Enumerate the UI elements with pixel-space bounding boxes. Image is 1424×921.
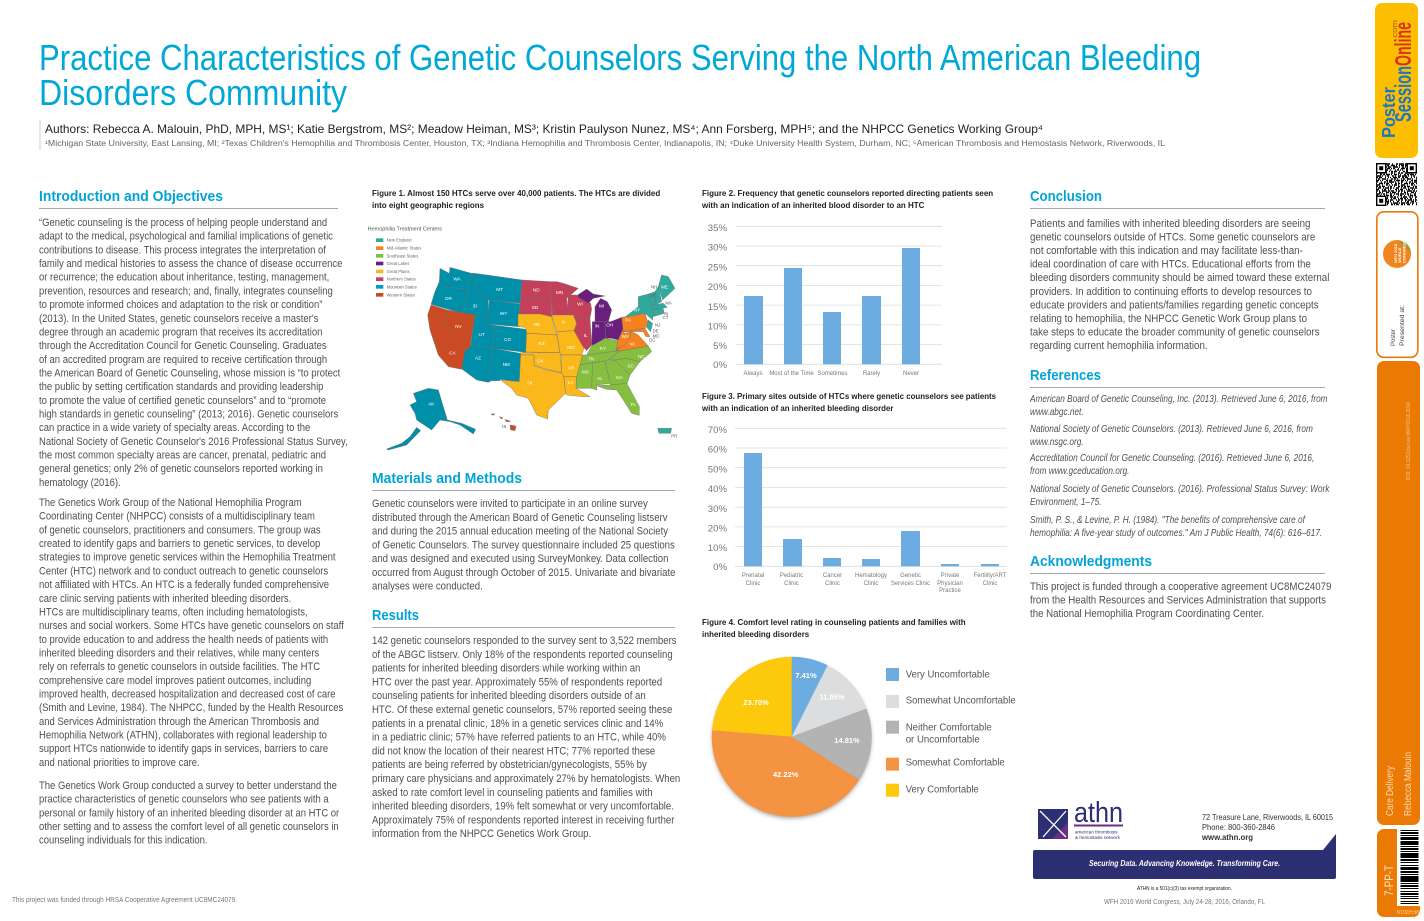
text block: intro paragraph 3 — [39, 781, 342, 847]
text block: conclusion: take steps to educate the broader community of genetic counselors — [1030, 327, 1320, 339]
text block: intro paragraph 2: created to identify gaps and barriers to genetic services, to develop — [39, 539, 321, 550]
sidebar: poster session online logo: Session — [1390, 66, 1416, 122]
pie legend: Very Comfortable — [906, 784, 979, 796]
state abbreviations: WA — [453, 276, 462, 281]
bar chart: figure 3: Clinic — [825, 581, 840, 587]
text block: references: National Society of Genetic Counselors. (2013). Retrieved June 6, 2016, from — [1030, 423, 1313, 434]
bar chart: figure 2 — [708, 223, 942, 377]
heading: conclusion: Conclusion — [1030, 188, 1102, 205]
map: hemophilia treatment centers: NJ — [655, 322, 660, 327]
bar chart: figure 3: Practice — [939, 588, 961, 594]
sidebar: poster session online logo: Poster — [1379, 87, 1399, 138]
text block: references: www.nsgc.org. — [1030, 436, 1084, 447]
map legend: Southeast States — [387, 253, 418, 258]
state abbreviations: NV — [455, 324, 462, 329]
text block: methods: Genetic counselors were invited to participate in an online survey — [372, 499, 649, 510]
figure 3 caption: with an indication of an inherited bleeding disorder — [701, 404, 894, 413]
state abbreviations: OR — [445, 296, 452, 301]
figure 2 caption — [701, 189, 993, 210]
bar chart: figure 3: Fertility/ART — [974, 573, 1007, 579]
panel: results — [372, 607, 683, 840]
bar chart: figure 3: Pediatric — [780, 573, 803, 579]
text block: conclusion: ideal coordination of care with HTCs. Educational efforts from the — [1030, 259, 1311, 271]
text block: intro paragraph 1: prevention, resources and research; and, finally, integrates counseling — [39, 286, 333, 298]
text block: intro paragraph 1: of an accredited program are required to receive certification through — [39, 354, 327, 366]
text block: references: www.abgc.net. — [1030, 406, 1084, 417]
text block: conclusion: bleeding disorders community should be aimed toward these external — [1030, 273, 1329, 284]
figure 3 caption — [701, 392, 996, 413]
state abbreviations: NC — [638, 354, 645, 359]
bar chart: figure 3: 40% — [708, 484, 727, 495]
sidebar: presented at panel — [1377, 212, 1418, 357]
region: new england — [626, 275, 675, 433]
text block: intro paragraph 1: the public by setting certification standards and providing leadership — [39, 382, 324, 393]
bar chart: figure 3: Clinic — [746, 581, 760, 587]
athn tax note: ATHN is a 501(c)(3) tax exempt organization. — [1137, 886, 1232, 892]
map legend: Great Lakes — [387, 261, 409, 266]
sidebar: poster session online logo — [1375, 3, 1418, 158]
text block: acknowledgments: from the Health Resources and Services Administration that supports — [1030, 595, 1326, 607]
state abbreviations: ME — [661, 285, 668, 290]
athn tagline band — [1033, 834, 1336, 879]
region: mountain states — [387, 267, 527, 450]
text block: intro paragraph 2: to provide education to and address the health needs of patients with — [39, 634, 328, 646]
text block: intro paragraph 1: “Genetic counseling is the process of helping people understand and — [39, 218, 327, 229]
state abbreviations: VA — [629, 341, 636, 346]
bar chart: figure 3: Physician — [937, 581, 963, 587]
state abbreviations: WI — [577, 302, 583, 307]
state abbreviations: IN — [595, 324, 599, 329]
state abbreviations: TN — [588, 356, 594, 361]
bar chart: figure 3: 30% — [708, 504, 727, 515]
text block: intro paragraph 2: rely on referrals to genetic counselors in outside facilities. The HTC — [39, 662, 320, 673]
text block: intro paragraph 2: The Genetics Work Group of the National Hemophilia Program — [39, 498, 302, 509]
panel: conclusion — [1030, 188, 1332, 352]
bar chart: figure 2: 30% — [708, 243, 727, 254]
sidebar: poster session online logo: .com — [1392, 20, 1399, 40]
text block: intro paragraph 2: Coordinating Center (NHPCC) consists of a multidisciplinary team — [39, 511, 315, 523]
text block: intro paragraph 3: practice characteristics of genetic counselors who see patients with a — [39, 794, 329, 806]
sidebar: presented at panel: Presented at: — [1399, 305, 1406, 346]
text block: results: inherited bleeding disorders, 19% felt somewhat or very uncomfortable. — [372, 801, 674, 813]
figure 1 caption: Figure 1. Almost 150 HTCs serve over 40,000 patients. The HTCs are divided — [372, 189, 660, 198]
title — [39, 37, 1201, 113]
pie legend: or Uncomfortable — [906, 734, 980, 746]
bar chart: figure 2: 0% — [713, 360, 727, 371]
region: southeast states — [576, 338, 652, 415]
text block: intro paragraph 1: adapt to the medical, psychological and familial implications of genetic — [39, 231, 333, 243]
text block: intro paragraph 1: can practice in a wide variety of specialty areas. According to the — [39, 423, 311, 434]
state abbreviations: WY — [500, 311, 507, 316]
bar chart: figure 2: 20% — [708, 282, 727, 293]
text block: results: counseling patients for inherited bleeding disorders outside of an — [372, 691, 646, 702]
bar chart: figure 3: Hematology — [855, 573, 887, 579]
state abbreviations: SC — [627, 363, 635, 368]
sidebar: presented at panel: Poster — [1390, 328, 1397, 346]
text block: methods: occurred from August through October of 2015. Univariate and bivariate — [372, 567, 676, 579]
text block: references: Smith, P. S., & Levine, P. H. (1984). "The benefits of comprehensive care of — [1030, 514, 1306, 525]
map legend: Western States — [387, 292, 415, 297]
text block: results: patients are being referred by obstetrician/gynecologists, 55% by — [372, 760, 648, 771]
map legend: New England — [387, 238, 412, 243]
text block: intro paragraph 1: to promote the value of certified genetic counselors” and to “promote — [39, 395, 326, 407]
map: hemophilia treatment centers: MD — [653, 334, 659, 339]
bar chart: figure 2: 5% — [713, 341, 727, 352]
bar chart: figure 3: 20% — [708, 524, 727, 534]
state abbreviations: MO — [567, 345, 575, 350]
text block: references: hemophilia: A five-year study of outcomes." Am J Public Health, 74(6): 616–617. — [1030, 527, 1322, 538]
text block: intro paragraph 2: inherited bleeding disorders and their relatives, while many centers — [39, 648, 319, 660]
text block: intro paragraph 1: (2013). In the United States, genetic counselors receive a master's — [39, 313, 318, 325]
title: Practice Characteristics of Genetic Counselors Serving the North American Bleeding — [39, 37, 1201, 78]
text block: intro paragraph 2: not affiliated with HTCs. An HTC is a federally funded comprehensive — [39, 580, 329, 591]
map: hemophilia treatment centers: VT — [651, 293, 657, 298]
bar chart: figure 3: Private — [941, 573, 960, 579]
sidebar: orange info band: Rebecca Malouin — [1402, 752, 1414, 816]
text block: references: American Board of Genetic Counseling, Inc. (2013). Retrieved June 6, 2016, from — [1029, 393, 1328, 404]
text block: acknowledgments — [1030, 582, 1334, 620]
map legend: Mid-Atlantic States — [387, 246, 421, 251]
bar chart: figure 3: Clinic — [983, 581, 997, 587]
state abbreviations: AL — [597, 376, 603, 381]
state abbreviations: CA — [449, 351, 456, 356]
region: northern states — [519, 280, 592, 351]
state abbreviations: CO — [504, 337, 512, 342]
figure 4 caption — [702, 618, 966, 639]
text block: intro paragraph 1: National Society of Genetic Counselor's 2016 Professional Status Survey, — [39, 436, 348, 448]
footer funding note: This project was funded through HRSA Cooperative Agreement UC8MC24079. — [12, 897, 237, 904]
state abbreviations: MS — [582, 369, 589, 374]
text block: intro paragraph 1: high standards in genetic counseling” (2013; 2016). Genetic counselors — [39, 409, 338, 421]
map legend: Great Plains — [387, 269, 410, 274]
pie legend: Very Uncomfortable — [906, 670, 990, 680]
map: hemophilia treatment centers: CT — [663, 315, 669, 320]
text block: intro paragraph 2: Hemophilia Network (ATHN), collaborates with regional leadership to — [39, 730, 327, 742]
state abbreviations: OH — [606, 323, 613, 328]
bar chart: figure 2: Never — [903, 371, 919, 377]
state abbreviations: NE — [534, 322, 540, 327]
text block: methods: and was designed and executed using SurveyMonkey. Data collection — [372, 554, 668, 565]
text block: conclusion — [1030, 219, 1332, 352]
pie legend: Somewhat Uncomfortable — [906, 696, 1016, 706]
text block: references: Environment, 1–75. — [1030, 496, 1102, 507]
map: hemophilia treatment centers: DC — [649, 337, 656, 342]
text block: intro paragraph 2: strategies to improve genetic services within the Hemophilia Treatment — [39, 552, 336, 564]
text block: results: 142 genetic counselors responded to the survey sent to 3,522 members — [372, 636, 677, 647]
bar chart: figure 3 — [708, 425, 1007, 594]
text block: acknowledgments: the National Hemophilia Program Coordinating Center. — [1030, 609, 1264, 620]
region: great plains — [501, 314, 590, 419]
text block: references: from www.gceducation.org. — [1030, 465, 1129, 476]
text block: references: National Society of Genetic Counselors. (2016). Professional Status Survey: Work — [1030, 483, 1331, 494]
region: great lakes — [578, 289, 623, 345]
pie chart: figure 4: 14.81% — [834, 736, 860, 745]
bar chart: figure 3: Clinic — [784, 581, 799, 587]
map legend: Hemophilia Treatment Centers — [368, 226, 442, 232]
sidebar: barcode tag: 7-PP-T — [1382, 864, 1396, 896]
figure 3 caption: Figure 3. Primary sites outside of HTCs where genetic counselors see patients — [702, 392, 996, 401]
sidebar: qr code — [1376, 163, 1417, 206]
bar chart: figure 3: Services Clinic — [891, 581, 930, 587]
sidebar: orange info band — [1377, 361, 1420, 825]
text block: intro paragraph 1: through the Accreditation Council for Genetic Counseling. Graduates — [39, 341, 327, 352]
text block: conclusion: not comfortable with this indication and may facilitate less-than- — [1030, 246, 1303, 257]
state abbreviations: FL — [631, 402, 636, 407]
state abbreviations — [428, 276, 668, 407]
text block: intro paragraph 1: degree through an academic program that receives its accreditation — [39, 327, 322, 339]
state abbreviations: UT — [479, 332, 485, 337]
text block: results: HTC. Of these external genetic counselors, 57% reported seeing these — [372, 705, 673, 716]
athn contact: www.athn.org — [1201, 832, 1253, 842]
text block: conclusion: regarding current hemophilia information. — [1030, 341, 1208, 352]
text block: intro paragraph 1: the most common specialty areas are cancer, prenatal, pediatric and — [39, 450, 326, 462]
icon: wfh congress globe — [1383, 240, 1411, 268]
text block: conclusion: genetic counselors outside of HTCs. Some genetic counselors are — [1030, 232, 1316, 244]
text block: results: information from the NHPCC Genetics Work Group. — [372, 829, 591, 840]
state abbreviations: TX — [527, 380, 534, 385]
text block: results: of the ABGC listserv. Only 18% of the respondents reported counseling — [372, 649, 673, 661]
text block: intro paragraph 2: HTCs are multidisciplinary teams, often including hematologists, — [39, 607, 308, 619]
text block: intro paragraph 2: nurses and social workers. Some HTCs have genetic counselors on staff — [39, 621, 344, 632]
text block: intro paragraph 2: support HTCs nationwide to identify gaps in services, barriers to care — [39, 744, 329, 755]
authors and affiliations: Authors: Rebecca A. Malouin, PhD, MPH, MS¹; Katie Bergstrom, MS²; Meadow Heiman, MS³; Kristin Paulyson Nunez, MS⁴; Ann Forsberg, MPH⁵; and the NHPCC Genetics Working Group⁴ — [45, 122, 1043, 136]
text block: results: patients for inherited bleeding disorders while working within an — [372, 663, 640, 675]
state abbreviations: AK — [428, 401, 435, 406]
text block: results: did not know the location of their nearest HTC; 77% reported these — [372, 746, 656, 758]
text block: intro paragraph 1: to promote informed choices and adaptation to the risk or condition” — [39, 300, 322, 311]
map: hemophilia treatment centers: RI — [664, 312, 668, 317]
pie chart: figure 4: 23.70% — [743, 698, 769, 707]
sidebar: orange info band: DOI: 10.3252/pso.eu.WFH2016.2016 — [1406, 402, 1412, 480]
text block: intro paragraph 2 — [39, 498, 346, 769]
text block: intro paragraph 1: the American Board of Genetic Counseling, whose mission is “to protect — [39, 368, 340, 380]
text block: methods — [372, 499, 678, 593]
state abbreviations: PA — [625, 317, 632, 322]
text block: results: Approximately 75% of respondents reported interest in receiving further — [372, 815, 675, 827]
pie legend: Neither Comfortable — [906, 722, 992, 734]
heading: results: Results — [372, 607, 419, 624]
map legend: Mountain States — [387, 284, 417, 289]
barcode — [1400, 830, 1418, 905]
state abbreviations: ID — [473, 304, 478, 309]
state abbreviations: KY — [600, 346, 606, 351]
state abbreviations: SD — [532, 305, 539, 310]
pie chart: figure 4 — [712, 657, 872, 818]
text block: methods: of Genetic Counselors. The survey questionnaire included 25 questions — [372, 540, 675, 551]
state abbreviations: AR — [568, 366, 575, 371]
state abbreviations: OK — [537, 359, 545, 364]
pie chart: figure 4: 11.85% — [819, 692, 845, 702]
text block: acknowledgments: This project is funded through a cooperative agreement UC8MC24079 — [1030, 582, 1332, 593]
pie legend: Somewhat Comfortable — [906, 758, 1005, 768]
panel: references — [1029, 367, 1332, 538]
text block: intro paragraph 1: contributions to disease. This process integrates the interpretation of — [39, 245, 326, 257]
icon: wfh congress globe: WORLD — [1397, 248, 1402, 263]
text block: intro paragraph 1: hematology (2016). — [39, 478, 121, 489]
bar chart: figure 2: Always — [743, 371, 763, 377]
text block: methods: analyses were conducted. — [372, 581, 483, 593]
bar chart: figure 3: Cancer — [823, 573, 842, 579]
figure 4 caption: inherited bleeding disorders — [702, 630, 810, 639]
text block: intro paragraph 2: Center (HTC) network and to conduct outreach to genetic counselors — [39, 566, 328, 578]
heading: materials and methods: Materials and Methods — [372, 470, 522, 487]
figure 1 caption: into eight geographic regions — [372, 201, 485, 210]
text block: references — [1029, 393, 1332, 538]
icon: wfh congress globe: WFH 2016 — [1393, 243, 1398, 263]
icon: wfh congress globe: CONGRESS — [1401, 240, 1406, 263]
map: hemophilia treatment centers: NH — [651, 285, 657, 290]
state abbreviations: NM — [503, 362, 510, 367]
state abbreviations: ND — [533, 288, 540, 293]
panel: acknowledgments — [1030, 553, 1334, 620]
bar chart: figure 2: 25% — [708, 262, 727, 273]
athn logo: american thrombosis — [1075, 830, 1118, 834]
text block: conclusion: Patients and families with inherited bleeding disorders are seeing — [1030, 219, 1310, 230]
bar chart: figure 2: 10% — [708, 322, 727, 332]
text block: intro paragraph 2: comprehensive care model improves patient outcomes, including — [39, 675, 311, 687]
conference note: WFH 2016 World Congress, July 24-28, 2016, Orlando, FL — [1104, 899, 1265, 906]
figure 4 caption: Figure 4. Comfort level rating in counseling patients and families with — [702, 618, 966, 627]
athn contact: 72 Treasure Lane, Riverwoods, IL 60015 — [1202, 812, 1333, 822]
text block: results: asked to rate comfort level in counseling patients and families with — [372, 787, 653, 799]
figure 2 caption: with an indication of an inherited blood disorder to an HTC — [701, 201, 924, 210]
map legend: Northern States — [387, 277, 416, 282]
state abbreviations: IA — [561, 319, 567, 324]
sidebar: barcode tag: WFH2016 — [1397, 908, 1421, 914]
bar chart: figure 3: Prenatal — [742, 573, 764, 579]
athn contact: Phone: 800-360-2846 — [1202, 822, 1275, 832]
bar chart: figure 3: Genetic — [900, 573, 921, 579]
state abbreviations: NY — [634, 308, 640, 313]
text block: results: primary care physicians and approximately 27% by hematologists. When — [372, 774, 680, 785]
state abbreviations: MN — [556, 290, 563, 295]
bar chart: figure 3: 10% — [708, 543, 727, 554]
text block: conclusion: relating to hemophilia, the NHPCC Genetic Work Group plans to — [1030, 314, 1307, 325]
heading: acknowledgments: Acknowledgments — [1030, 553, 1152, 570]
text block: intro paragraph 3: The Genetics Work Group conducted a survey to better understand the — [39, 781, 337, 792]
bar chart: figure 2: 35% — [708, 223, 727, 234]
state abbreviations: LA — [568, 380, 574, 385]
text block: intro paragraph 2: and national priorities to improve care. — [39, 758, 200, 769]
map: hemophilia treatment centers: DE — [653, 328, 659, 333]
title: Disorders Community — [39, 72, 347, 113]
state abbreviations: AZ — [475, 355, 481, 360]
text block: intro paragraph 1: general genetics; only 2% of genetic counselors reported working in — [39, 464, 323, 475]
text block: intro paragraph 3: personal or family history of an inherited bleeding disorder at an HTC or — [39, 808, 340, 820]
athn logo: & hemostasis network — [1075, 835, 1121, 840]
bar chart: figure 3: 0% — [713, 562, 727, 573]
athn logo — [1038, 797, 1123, 840]
map legend — [368, 226, 442, 297]
bar chart: figure 3: 60% — [708, 445, 727, 456]
text block: intro paragraph 1: or recurrence; the education about inheritance, testing, management, — [39, 272, 329, 284]
text block: results — [372, 636, 683, 840]
bar chart: figure 3: Clinic — [864, 581, 878, 587]
sidebar: orange info band: Care Delivery — [1384, 765, 1396, 816]
text block: methods: and during the 2015 annual education meeting of the National Society — [372, 526, 669, 538]
bar chart: figure 2: Rarely — [863, 371, 880, 377]
sidebar: barcode tag — [1377, 829, 1421, 917]
panel: materials and methods — [372, 470, 678, 593]
bar chart: figure 3: 70% — [708, 425, 727, 436]
panel: introduction and objectives — [39, 188, 350, 847]
state abbreviations: WV — [622, 334, 630, 339]
state abbreviations: GA — [616, 375, 624, 380]
heading: introduction: Introduction and Objectives — [39, 188, 223, 205]
text block: results: HTC over the past year. Approximately 55% of respondents reported — [372, 677, 662, 689]
state abbreviations: MT — [496, 287, 503, 292]
athn contact — [1201, 812, 1333, 842]
text block: intro paragraph 2: care clinic serving patients with inherited bleeding disorders. — [39, 593, 291, 605]
authors and affiliations — [40, 120, 1166, 150]
map: hemophilia treatment centers: PR — [671, 434, 677, 439]
authors and affiliations: ¹Michigan State University, East Lansing, MI; ²Texas Children's Hemophilia and Thrombosis Center, Houston, TX; ³Indiana Hemophilia and Thrombosis Center, Indianapolis, IN; ⁴Duke University Health System, Durham, NC; ⁵American Thrombosis and Hemostasis Network, Riverwoods, IL — [45, 139, 1166, 148]
text block: intro paragraph 1: family and medical histories to assess the chance of disease occurrence — [39, 259, 343, 270]
figure 2 caption: Figure 2. Frequency that genetic counselors reported directing patients seen — [702, 189, 993, 198]
text block: intro paragraph 2: improved health, decreased hospitalization and decreased cost of care — [39, 689, 336, 701]
bar chart: figure 3: 50% — [708, 464, 727, 475]
athn tagline band: Securing Data. Advancing Knowledge. Transforming Care. — [1089, 858, 1280, 868]
pie chart: figure 4: 7.41% — [795, 671, 817, 680]
text block: references: Accreditation Council for Genetic Counseling. (2016). Retrieved June 6, 2016, — [1029, 452, 1314, 463]
state abbreviations: MI — [599, 303, 604, 308]
text block: results: patients in a prenatal clinic, 18% in a genetic services clinic and 14% — [372, 718, 663, 730]
text block: intro paragraph 2: (Smith and Levine, 1984). The NHPCC, funded by the Health Resources — [39, 703, 343, 714]
text block: intro paragraph 3: other setting and to assess the comfort level of all genetic counselors in — [39, 822, 339, 833]
region: western states — [428, 305, 516, 431]
region: mid-atlantic states — [616, 313, 650, 351]
bar chart: figure 2: 15% — [708, 302, 727, 313]
bar chart: figure 2: Most of the Time — [769, 371, 814, 377]
map: hemophilia treatment centers: HI — [502, 424, 506, 429]
pie legend — [886, 668, 1016, 797]
map: hemophilia treatment centers — [368, 226, 677, 450]
pie chart: figure 4: 42.22% — [773, 770, 799, 779]
text block: results: in a pediatric clinic; 57% have referred patients to an HTC, while 40% — [372, 732, 666, 744]
text block: conclusion: providers. In addition to continuing efforts to develop resources to — [1030, 286, 1312, 298]
text block: intro paragraph 3: counseling individuals for this indication. — [39, 835, 208, 847]
figure 1 caption — [372, 189, 660, 210]
text block: intro paragraph 2: of genetic counselors, practitioners and consumers. The group was — [39, 525, 321, 537]
text block: conclusion: educate providers and patients/families regarding genetic concepts — [1030, 300, 1319, 311]
map: hemophilia treatment centers: MA — [665, 301, 672, 306]
state abbreviations: IL — [584, 333, 588, 338]
state abbreviations: KS — [539, 341, 545, 346]
heading: references: References — [1030, 367, 1101, 384]
text block: methods: distributed through the American Board of Genetic Counseling listserv — [372, 512, 668, 524]
athn logo: athn — [1074, 797, 1123, 829]
text block: intro paragraph 1 — [39, 218, 350, 489]
bar chart: figure 2: Sometimes — [817, 371, 848, 377]
text block: intro paragraph 2: and Services Administration through the American Thrombosis and — [39, 716, 319, 728]
